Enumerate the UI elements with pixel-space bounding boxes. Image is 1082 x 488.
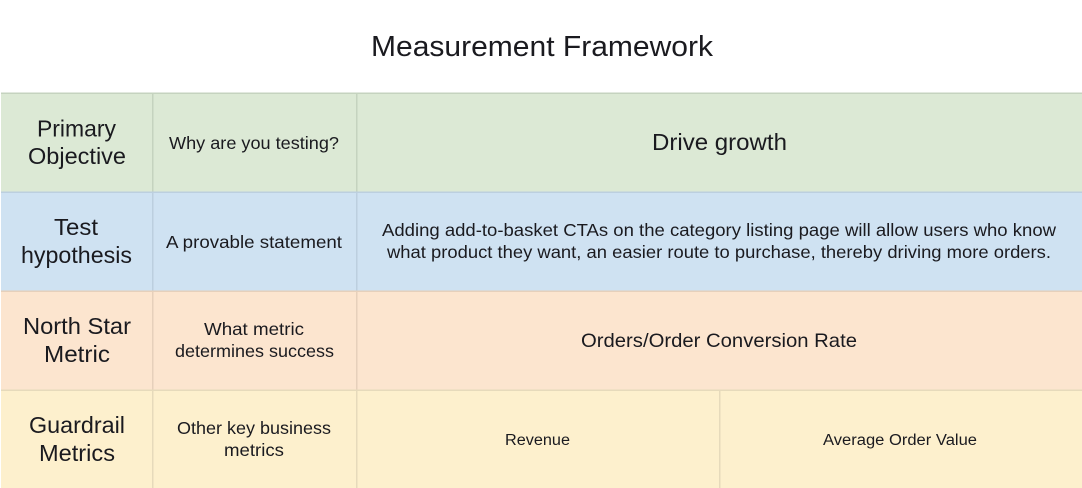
heading: primary objective xyxy=(28,116,126,169)
value: hypothesis statement xyxy=(382,220,1056,262)
prompt: what metric determines success xyxy=(175,319,334,361)
prompt: what metric determines success: What metric xyxy=(204,319,304,339)
prompt: other key business metrics xyxy=(177,418,331,460)
heading: test hypothesis xyxy=(21,214,132,268)
row: guardrail metrics xyxy=(1,390,1082,488)
heading: guardrail metrics xyxy=(29,412,125,466)
prompt: why are you testing: Why are you testing? xyxy=(169,133,339,153)
heading: primary objective: Primary xyxy=(37,116,116,142)
value: drive growth: Drive growth xyxy=(652,129,787,155)
row: primary objective xyxy=(1,92,1082,192)
prompt: what metric determines success: determines success xyxy=(175,341,334,361)
heading: guardrail metrics: Guardrail xyxy=(29,412,125,438)
heading: guardrail metrics: Metrics xyxy=(39,440,115,466)
heading: north star metric: Metric xyxy=(44,341,110,367)
value: revenue: Revenue xyxy=(505,432,570,449)
value: orders conversion rate: Orders/Order Conversion Rate xyxy=(581,330,857,352)
heading: test hypothesis: hypothesis xyxy=(21,242,132,268)
heading: test hypothesis: Test xyxy=(54,214,99,240)
heading: north star metric: North Star xyxy=(23,313,131,339)
row: north star metric xyxy=(1,290,1082,390)
prompt: other key business metrics: Other key business xyxy=(177,418,331,438)
title: Measurement Framework xyxy=(371,31,714,63)
prompt: a provable statement: A provable statement xyxy=(166,232,342,252)
row: test hypothesis xyxy=(1,192,1082,291)
heading: primary objective: Objective xyxy=(28,143,126,169)
value: hypothesis statement: what product they want, an easier route to purchase, thereby driving more orders. xyxy=(386,242,1051,262)
value: hypothesis statement: Adding add-to-basket CTAs on the category listing page will allow users who know xyxy=(382,220,1056,240)
prompt: other key business metrics: metrics xyxy=(224,440,284,460)
value: average order value: Average Order Value xyxy=(823,432,977,449)
heading: north star metric xyxy=(23,313,131,367)
